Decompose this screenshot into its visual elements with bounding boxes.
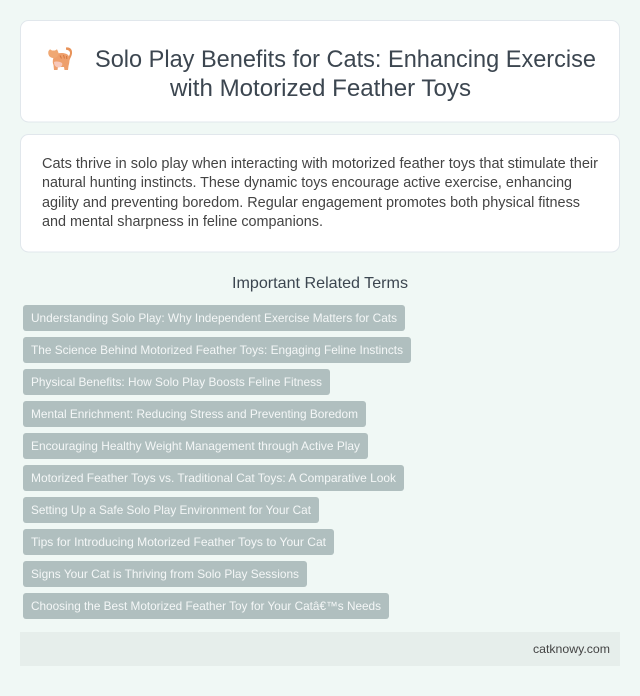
panel: title card (20, 20, 620, 122)
title: with Motorized Feather Toys (169, 75, 471, 102)
tag 7: Setting Up a Safe Solo Play Environment for Your Cat (31, 503, 312, 517)
description text: agility and preventing boredom. Regular engagement promotes both physical fitness (42, 195, 580, 211)
title: Solo Play Benefits for Cats: Enhancing Exercise (95, 46, 596, 73)
description text: natural hunting instincts. These dynamic toys encourage active exercise, enhancing (42, 175, 572, 191)
tag 9: Signs Your Cat is Thriving from Solo Play Sessions (31, 567, 299, 581)
title (95, 46, 596, 102)
description text: Cats thrive in solo play when interacting with motorized feather toys that stimulate their (42, 156, 598, 172)
tag 4: Mental Enrichment: Reducing Stress and Preventing Boredom (31, 407, 358, 421)
tag 3 (23, 369, 330, 395)
tag 1: Understanding Solo Play: Why Independent Exercise Matters for Cats (31, 311, 397, 325)
footer bar (20, 632, 620, 666)
tag 5 (23, 433, 368, 459)
description text: and mental sharpness in feline companions. (42, 214, 323, 230)
icon: cat (48, 47, 72, 70)
tag 1 (23, 305, 405, 331)
description text (42, 156, 598, 230)
tag 8 (23, 529, 334, 555)
tag 4 (23, 401, 366, 427)
tag 6 (23, 465, 404, 491)
tag 8: Tips for Introducing Motorized Feather Toys to Your Cat (31, 535, 327, 549)
footer source: catknowy.com (533, 642, 610, 656)
tag 10: Choosing the Best Motorized Feather Toy for Your Catâ€™s Needs (31, 599, 381, 613)
tag 2 (23, 337, 411, 363)
tag 6: Motorized Feather Toys vs. Traditional Cat Toys: A Comparative Look (31, 471, 397, 485)
tag 3: Physical Benefits: How Solo Play Boosts Feline Fitness (31, 375, 322, 389)
panel: description (20, 134, 620, 252)
tag 2: The Science Behind Motorized Feather Toys: Engaging Feline Instincts (31, 343, 403, 357)
tag 9 (23, 561, 307, 587)
tag 5: Encouraging Healthy Weight Management through Active Play (31, 439, 360, 453)
tag 7 (23, 497, 319, 523)
list: related term tags (23, 305, 411, 619)
heading: related terms: Important Related Terms (232, 275, 408, 292)
tag 10 (23, 593, 389, 619)
